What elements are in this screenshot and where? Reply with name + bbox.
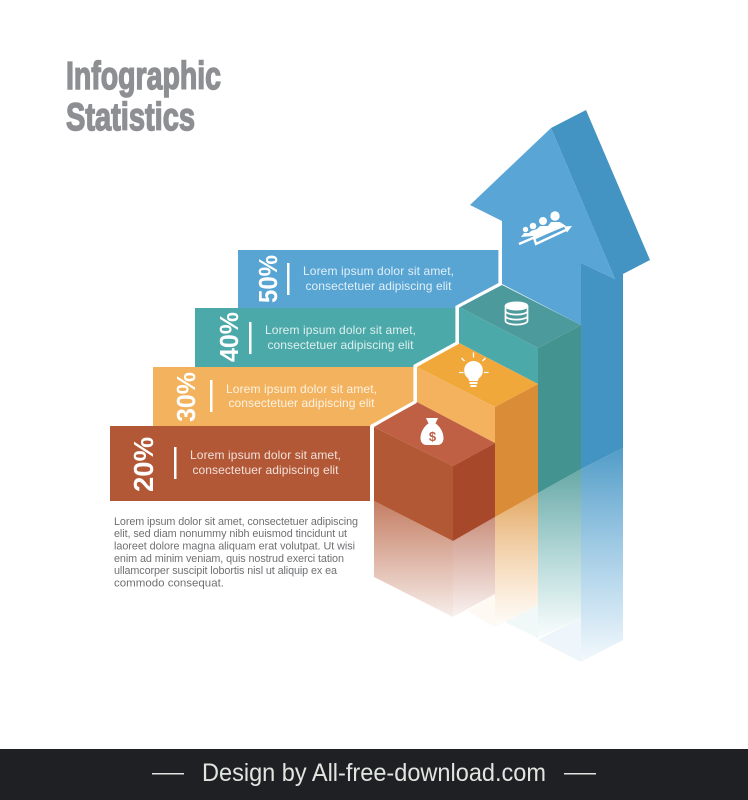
banner: 50%: consectetuer adipiscing elit <box>306 279 452 293</box>
banner: 20%: consectetuer adipiscing elit <box>192 463 339 477</box>
title <box>66 55 221 139</box>
banner: 50%: Lorem ipsum dolor sit amet, <box>303 264 454 278</box>
banner: 20% <box>110 426 370 501</box>
body text block: ullamcorper suscipit lobortis nisl ut aliquip ex ea <box>114 565 337 577</box>
icon: money bag: $ <box>429 429 437 444</box>
banner: 30% <box>153 367 415 426</box>
banner: 40%: Lorem ipsum dolor sit amet, <box>265 323 416 337</box>
body text block <box>114 516 358 590</box>
icon: coin stack <box>506 302 528 325</box>
banner: 30%: 30% <box>171 372 201 422</box>
block: red 20% column <box>374 402 495 541</box>
body text block: commodo consequat. <box>114 578 224 590</box>
banner: 50%: 50% <box>253 255 283 303</box>
block: teal 40% column <box>459 285 581 493</box>
footer bar: Design by All-free-download.com <box>202 759 546 787</box>
block: orange 30% column <box>417 343 538 517</box>
body text block: Lorem ipsum dolor sit amet, consectetuer adipiscing <box>114 516 358 528</box>
3D arrow: blue 50% column <box>470 110 650 469</box>
banner: 50% <box>238 250 500 308</box>
banner: 30%: Lorem ipsum dolor sit amet, <box>226 382 377 396</box>
title: Statistics <box>66 96 195 139</box>
reflection of the stacked blocks <box>374 448 623 662</box>
banner: 20%: 20% <box>128 437 159 492</box>
banner: 20%: Lorem ipsum dolor sit amet, <box>190 448 341 462</box>
icon: team on rising arrow <box>519 211 572 244</box>
footer bar <box>0 749 748 800</box>
title: Infographic <box>66 55 221 98</box>
banner: 40%: consectetuer adipiscing elit <box>268 338 414 352</box>
banner: 40% <box>195 308 457 367</box>
banner: 40%: 40% <box>214 312 244 362</box>
body text block: elit, sed diam nonummy nibh euismod tincidunt ut <box>114 528 347 540</box>
body text block: enim ad minim veniam, quis nostrud exerci tation <box>114 553 344 565</box>
banner: 30%: consectetuer adipiscing elit <box>228 396 375 410</box>
body text block: laoreet dolore magna aliquam erat volutpat. Ut wisi <box>114 540 355 552</box>
icon: light bulb <box>459 352 488 387</box>
icon: money bag <box>420 418 444 445</box>
